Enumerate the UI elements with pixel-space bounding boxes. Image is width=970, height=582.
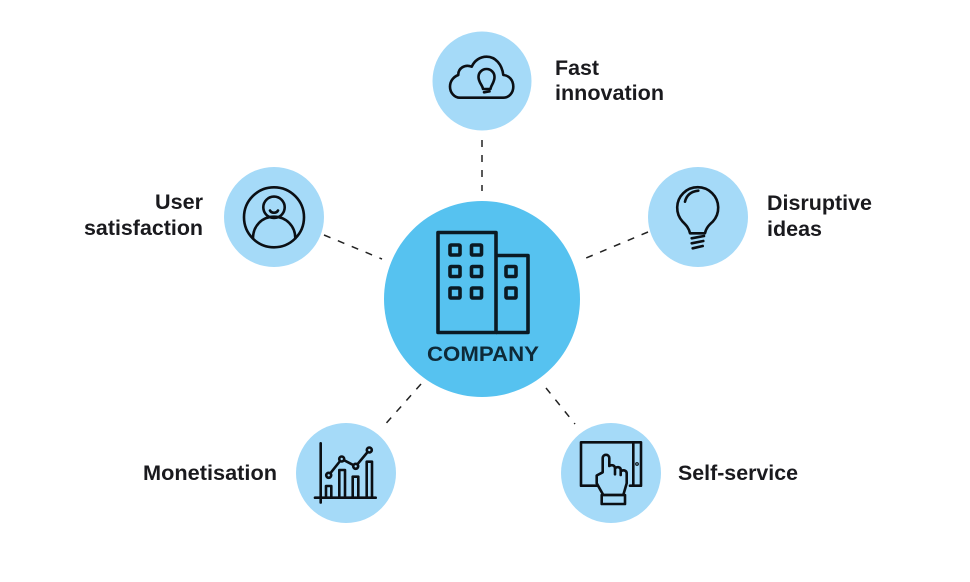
label: user satisfaction: satisfaction — [84, 217, 203, 240]
node: fast innovation — [432, 32, 532, 130]
node: monetisation — [296, 423, 396, 523]
label: disruptive ideas — [767, 192, 872, 241]
node: user satisfaction — [224, 167, 324, 267]
label: fast innovation — [555, 57, 664, 105]
icon: light bulb — [677, 187, 718, 248]
icon: cloud with bulb — [450, 57, 513, 98]
label: user satisfaction: User — [155, 191, 203, 214]
node: disruptive ideas — [648, 167, 748, 267]
label: fast innovation: innovation — [555, 82, 664, 105]
label: monetisation: Monetisation — [143, 462, 277, 485]
icon: chart — [315, 443, 376, 502]
dashed connectors — [324, 140, 648, 428]
label: disruptive ideas: ideas — [767, 218, 822, 241]
label: self-service: Self-service — [678, 462, 798, 485]
icon: tablet with hand — [581, 442, 641, 504]
label: user satisfaction — [84, 191, 203, 240]
icon: user — [244, 187, 304, 247]
node: self-service — [561, 423, 661, 523]
label: fast innovation: Fast — [555, 57, 599, 80]
central company node — [384, 201, 580, 397]
label: disruptive ideas: Disruptive — [767, 192, 872, 215]
company label: COMPANY — [427, 343, 539, 366]
icon: building — [438, 232, 528, 332]
